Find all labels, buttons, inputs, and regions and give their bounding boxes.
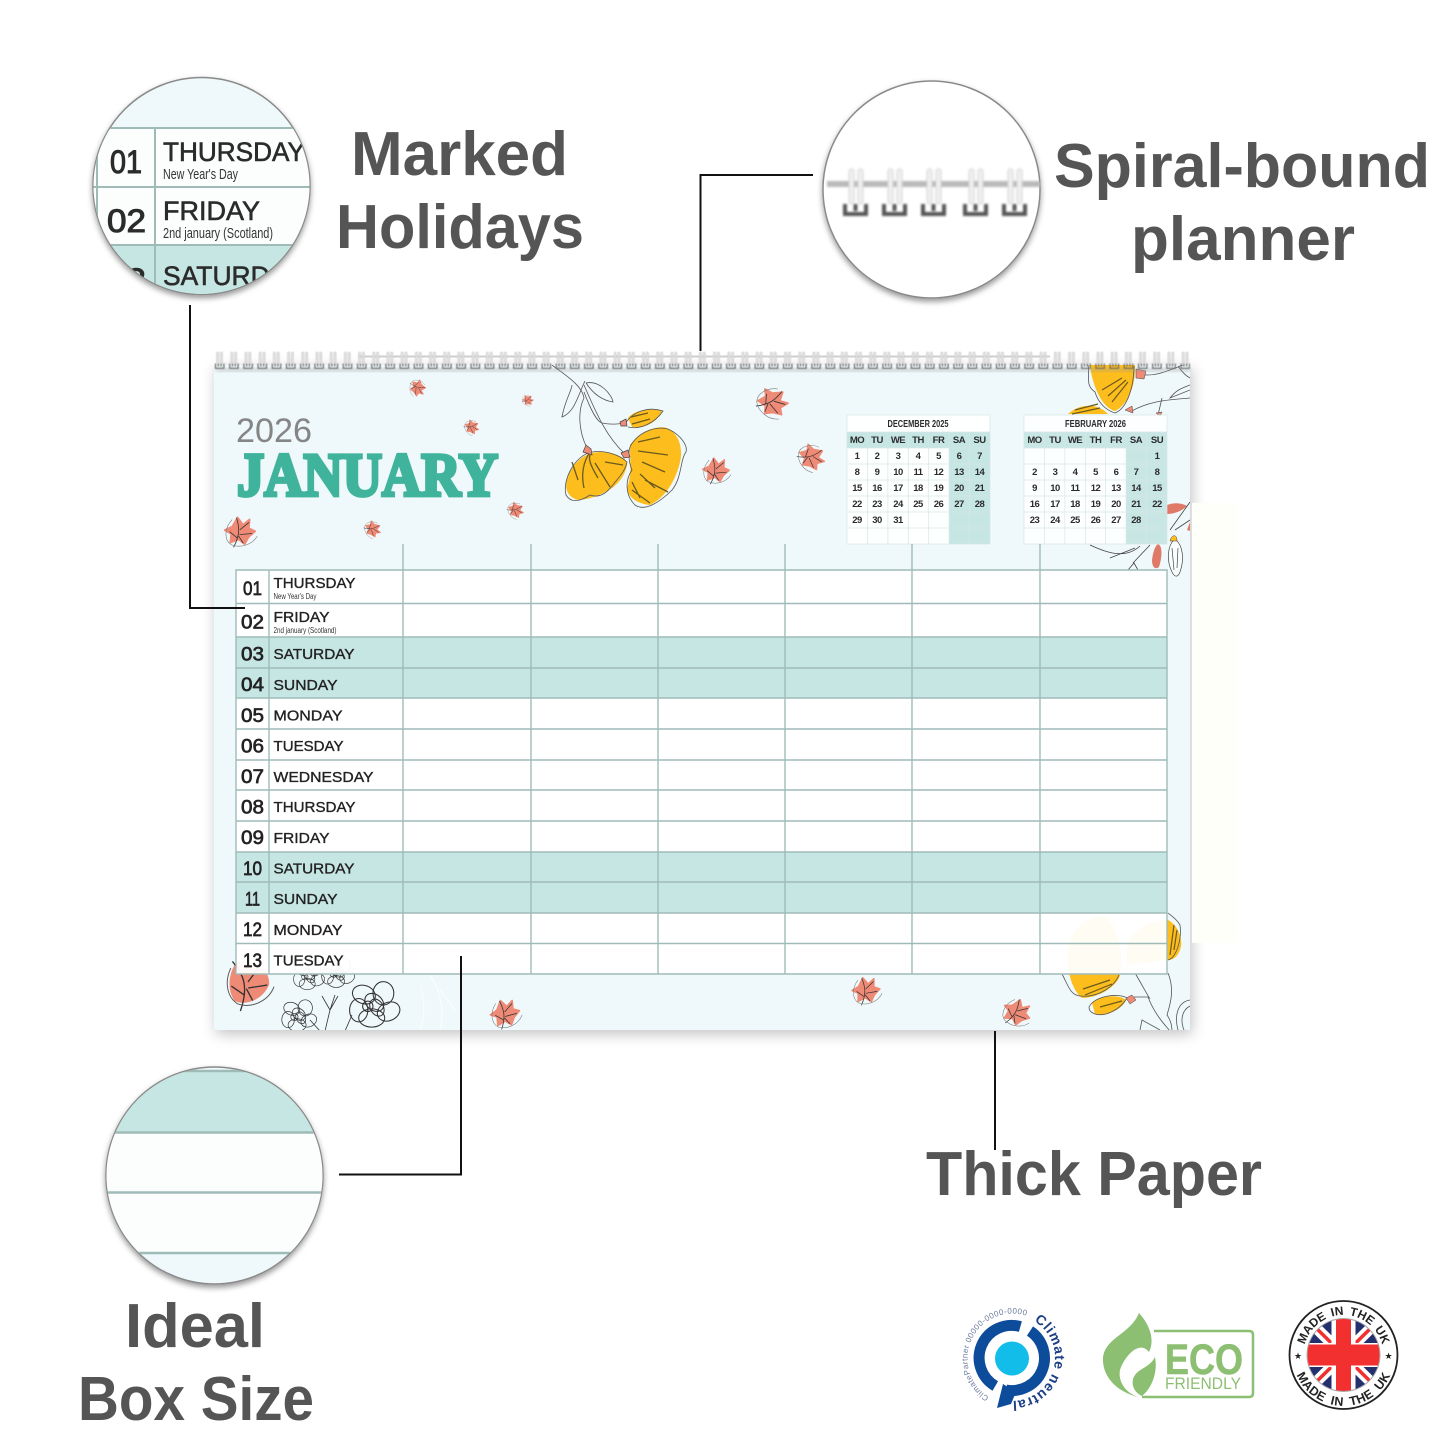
mini calendar: February 2026: FR [1110,435,1122,446]
mini calendar: February 2026: 12 [1091,483,1100,494]
holiday note: New Year's Day [163,166,238,183]
calendar sheet [214,365,1190,1030]
icon: enlarged coils [827,169,1040,214]
day rows: SATURDAY [274,646,354,663]
mini calendar: December 2025: 29 [852,515,862,526]
badge: made in the UK: MADE IN THE UK [1297,1306,1390,1344]
heading: Spiral-bound planner: Spiral-bound [1054,132,1430,201]
badge: made in the UK: MADE IN THE UK [1296,1372,1390,1406]
mini calendar: February 2026: 21 [1131,499,1142,510]
mini calendar: December 2025: 11 [913,467,924,478]
day rows: MONDAY [274,708,342,724]
day rows: TUESDAY [274,738,344,755]
badge: made in the UK: ★ [1294,1352,1302,1362]
mini calendar: December 2025: 24 [893,499,904,510]
mini calendar: February 2026: 13 [1111,483,1121,494]
day rows: 13 [243,951,262,972]
arrow: spiral connector [700,175,813,351]
floral artwork [219,362,1190,1031]
day rows: FRIDAY [274,830,330,847]
mini calendar: February 2026: 16 [1030,499,1039,510]
mini calendar: December 2025: 3 [896,451,901,462]
mini calendar: December 2025: 17 [893,483,903,494]
day rows: 03 [241,644,264,666]
magnifier: box size [106,1067,324,1284]
mini calendar: December 2025: 25 [913,499,924,510]
mini calendar: February 2026: 18 [1070,499,1080,510]
day rows: 2nd january (Scotland) [274,626,337,635]
heading: Marked Holidays [336,120,584,262]
badge: eco friendly: ECO [1165,1336,1243,1384]
mini calendar: December 2025: SA [953,435,966,446]
mini calendar: February 2026: 2 [1032,467,1037,478]
mini calendar: December 2025: MO [850,435,864,446]
mini calendar: December 2025: 2 [875,451,880,462]
badge: climate neutral: ClimatePartner 00000-0000-0000 [962,1308,1027,1400]
day rows: 08 [241,798,264,818]
mini calendar: December 2025 [847,415,990,544]
icon: top-right yellow flower [1068,362,1190,416]
mini calendar: December 2025: DECEMBER 2025 [888,419,949,430]
arrow: box size connector [339,956,461,1174]
title: 2026 January calendar planner [214,350,1238,1031]
mini calendar: February 2026: 19 [1091,499,1100,510]
icon: central yellow flower [552,365,686,507]
mini calendar: December 2025: 12 [934,467,943,478]
mini calendar: February 2026: FEBRUARY 2026 [1065,419,1126,430]
magnifier: spiral binding [823,81,1040,298]
mini calendar: December 2025: 23 [872,499,882,510]
day rows: TUESDAY [274,952,344,970]
heading: Ideal Box Size: Ideal [125,1292,265,1361]
mini calendar: December 2025: TH [912,435,924,446]
day rows: 07 [241,767,264,788]
day rows: 01 [243,579,262,600]
mini calendar: December 2025: 16 [872,483,882,494]
faint reflection panel [1192,503,1238,943]
mini calendar: February 2026: TU [1049,435,1061,446]
arrow: marked holidays connector [190,305,245,608]
mini calendar: December 2025: 31 [893,515,904,526]
day rows: New Year's Day [274,592,316,601]
day rows: 12 [243,920,262,941]
mini calendar: February 2026: 17 [1050,499,1060,510]
mini calendar: February 2026: 11 [1070,483,1081,494]
mini calendar: February 2026: 6 [1114,467,1119,478]
holiday note: 2nd january (Scotland) [163,225,273,242]
heading: Spiral-bound planner [1054,132,1430,274]
mini calendar: February 2026: 3 [1053,467,1058,478]
day rows: SUNDAY [274,891,338,908]
heading: Thick Paper: Thick Paper [926,1140,1262,1209]
mini calendar: December 2025: 28 [975,499,984,510]
badge: climate neutral: Climate neutral [1014,1315,1064,1411]
mini calendar: February 2026: 1 [1155,451,1161,462]
mini calendar: December 2025: 27 [954,499,964,510]
badge: made in the UK [1288,1300,1398,1410]
mini calendar: December 2025: 7 [977,451,982,462]
mini calendar: February 2026: MO [1027,435,1042,446]
mini calendar: February 2026: 14 [1131,483,1142,494]
day rows: 10 [243,859,262,880]
mini calendar: December 2025: FR [933,435,945,446]
day label Saturday: SATURDAY [163,261,303,291]
day rows: WEDNESDAY [274,769,374,786]
day number 03: 03 [107,262,146,298]
mini calendar: December 2025: 9 [875,467,880,478]
mini calendar: December 2025: 10 [893,467,903,478]
day label Friday: FRIDAY [163,196,260,226]
heading: Spiral-bound planner: planner [1131,205,1355,274]
mini calendar: February 2026: 7 [1134,467,1139,478]
heading: Ideal Box Size [78,1292,314,1434]
mini calendar: December 2025: 15 [852,483,863,494]
mini calendar: February 2026: 5 [1093,467,1099,478]
mini calendar: December 2025: 21 [975,483,985,494]
day rows: FRIDAY [274,609,330,626]
magnifier: marked holidays [93,78,313,300]
heading: Marked Holidays: Holidays [336,193,584,262]
mini calendar: December 2025: 13 [954,467,964,478]
badge: eco friendly: FRIENDLY [1165,1374,1241,1393]
day rows: SATURDAY [274,860,354,878]
mini calendar: February 2026: 9 [1032,483,1037,494]
day rows: 05 [241,706,264,727]
mini calendar: December 2025: WE [891,435,905,446]
heading: Marked Holidays: Marked [351,120,568,189]
mini calendar: December 2025: 1 [855,451,861,462]
mini calendar: February 2026: TH [1090,435,1102,446]
mini calendar: December 2025: 22 [852,499,862,510]
mini calendar: February 2026: 25 [1070,515,1081,526]
day rows: SUNDAY [274,677,338,694]
icon: bottom-right flower [1062,913,1190,1031]
heading: year: 2026 [236,412,312,450]
day number 01: 01 [110,144,142,180]
mini calendar: February 2026 [1024,415,1167,544]
day rows: 09 [241,828,264,849]
mini calendar: December 2025: 4 [916,451,922,462]
heading: month: JANUARY [237,442,498,510]
mini calendar: December 2025: TU [871,435,883,446]
day rows: 06 [241,736,264,758]
mini calendar: December 2025: 6 [957,451,962,462]
planner table [236,544,1167,974]
badge: made in the UK: ★ [1384,1352,1393,1362]
day rows: 02 [241,612,264,634]
mini calendar: February 2026: 4 [1073,467,1079,478]
icon: right-edge flower and bud [1090,502,1190,576]
day rows: 04 [241,675,264,696]
mini calendar: December 2025: 18 [913,483,923,494]
day rows [241,575,374,972]
mini calendar: February 2026: 27 [1111,515,1121,526]
icon: line-art flowers bottom left [282,958,455,1031]
mini calendar: February 2026: 10 [1050,483,1060,494]
day rows: 11 [245,890,260,910]
mini calendar: February 2026: 20 [1111,499,1121,510]
mini calendar: December 2025: 30 [872,515,882,526]
mini calendar: February 2026: 8 [1155,467,1160,478]
mini calendar: February 2026: 22 [1152,499,1162,510]
mini calendar: December 2025: 5 [936,451,942,462]
mini calendar: December 2025: 19 [934,483,943,494]
day rows: THURSDAY [274,575,356,592]
mini calendar: February 2026: SU [1151,435,1164,446]
arrow: thick paper connector [994,1031,996,1150]
icon: scattered autumn leaves [219,380,1034,1031]
mini calendar: February 2026: SA [1130,435,1143,446]
day rows: MONDAY [274,922,342,939]
spiral binding [214,350,1190,372]
mini calendar: December 2025: 14 [975,467,985,478]
mini calendar: December 2025: 8 [855,467,860,478]
day rows: THURSDAY [274,799,356,816]
badge: eco friendly [1103,1313,1253,1397]
mini calendar: February 2026: 23 [1030,515,1039,526]
mini calendar: February 2026: 28 [1131,515,1141,526]
mini calendar: February 2026: 24 [1050,515,1061,526]
mini calendar: December 2025: 20 [954,483,964,494]
badge: climate neutral [962,1308,1064,1411]
mini calendar: December 2025: SU [973,435,986,446]
mini calendar: December 2025: 26 [934,499,943,510]
day number 02: 02 [107,203,146,239]
mini calendar: February 2026: WE [1068,435,1082,446]
mini calendar: February 2026: 15 [1152,483,1163,494]
heading: Ideal Box Size: Box Size [78,1365,314,1434]
day label Thursday: THURSDAY [163,137,305,167]
mini calendar: February 2026: 26 [1091,515,1100,526]
